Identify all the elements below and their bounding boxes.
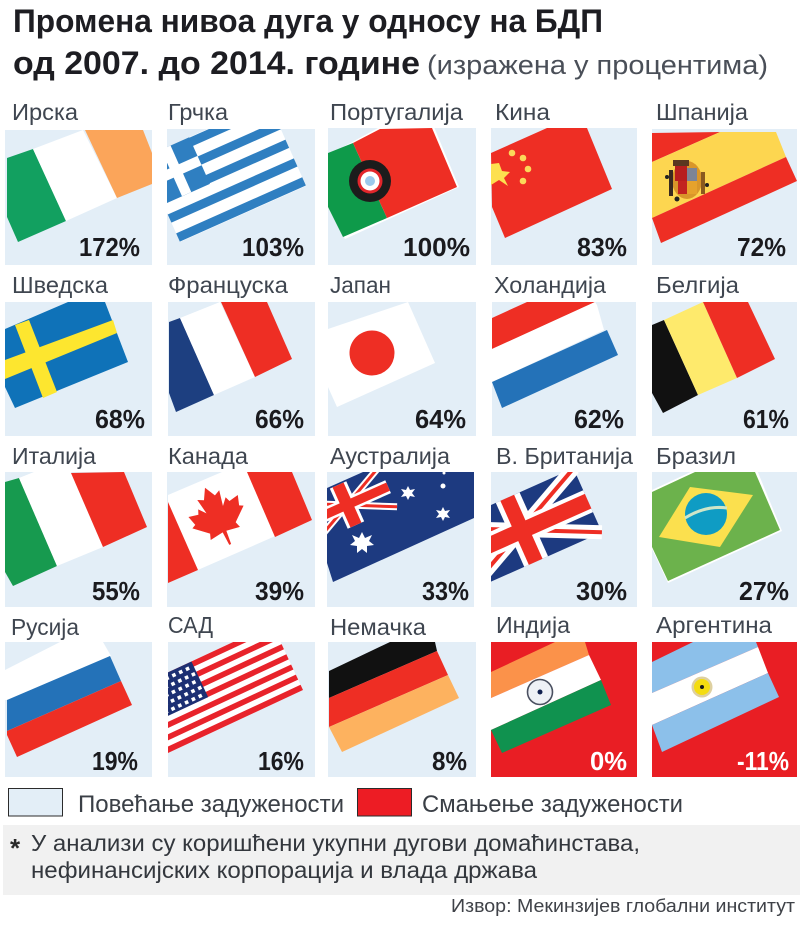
panel: Немачка: 8% [432,746,467,776]
panel: Индија: Индија [496,612,570,638]
legend: increase: Повећање задужености [78,791,344,818]
panel: САД: 16% [258,746,304,776]
panel: Холандија: Холандија [494,272,606,298]
panel: Холандија: 62% [574,404,624,434]
panel: Шпанија: 72% [737,232,786,262]
panel: Белгија [652,272,797,436]
panel: Италија: Италија [12,443,96,469]
panel: Јапан [328,272,476,436]
panel: В. Британија: 30% [576,576,627,606]
panel: Белгија: Белгија [656,272,739,298]
panel: Индија: 0% [590,746,627,776]
panel: Шпанија: Шпанија [656,99,748,125]
panel: Португалија [328,99,476,265]
panel: Француска: Француска [168,272,288,298]
panel: Шведска [5,272,152,436]
panel: В. Британија [491,448,637,607]
panel: Аустралија: 33% [422,576,469,606]
panel: Шведска: 68% [95,404,145,434]
footnote panel: У анализи су коришћени укупни дугови домаћинстава, [31,830,640,856]
panel: САД: САД [168,612,213,638]
panel: Грчка: Грчка [168,99,228,125]
panel: Русија [5,614,152,777]
panel: Италија [5,443,152,607]
panel: Белгија: 61% [743,404,789,434]
panel: Француска: 66% [255,404,304,434]
panel: САД [168,617,315,777]
panel: Ирска: Ирска [12,99,78,125]
title [13,3,768,81]
panel: Јапан: Јапан [330,272,391,298]
panel: Немачка: Немачка [330,614,426,640]
panel: Немачка [328,614,476,777]
panel: Португалија: 100% [403,232,470,262]
panel: Шпанија [652,99,797,265]
panel: Француска [168,272,315,436]
panel: Бразил [652,443,797,607]
panel: В. Британија: В. Британија [496,443,633,469]
panel: Бразил: 27% [739,576,789,606]
panel: Шведска: Шведска [12,272,108,298]
panel: Грчка: 103% [242,232,304,262]
panel: Русија: Русија [11,614,79,640]
source: Извор: Мекинзијев глобални институт [451,895,796,916]
panel: Италија: 55% [92,576,140,606]
panel: Грчка [167,104,315,265]
panel: Аргентина: Аргентина [656,612,772,638]
footnote panel: * [10,833,21,863]
panel: Аргентина: -11% [737,746,789,776]
panel: Канада: Канада [168,443,248,469]
title: Промена нивоа дуга у односу на БДП [13,3,603,39]
panel: Ирска: 172% [79,232,140,262]
panel: Бразил: Бразил [656,443,736,469]
legend: decrease: Смањење задужености [422,791,683,818]
panel: Холандија [492,272,636,436]
title: (изражена у процентима) [427,50,768,80]
panel: Индија [491,612,637,777]
panel: Русија: 19% [92,746,138,776]
panel: Канада [167,443,315,607]
title: од 2007. до 2014. године [13,45,420,81]
panel: Аустралија: Аустралија [330,443,450,469]
footnote panel [3,825,800,895]
footnote panel: нефинансијских корпорација и влада држава [31,857,537,883]
panel: Аустралија [327,448,474,607]
panel: Канада: 39% [255,576,304,606]
panel: Јапан: 64% [415,404,466,434]
panel: Португалија: Португалија [330,99,463,125]
panel: Кина: Кина [495,99,550,125]
panel: Аргентина [652,612,797,777]
panel: Ирска [5,99,152,265]
panel: Кина [491,99,637,265]
panel: Кина: 83% [577,232,627,262]
